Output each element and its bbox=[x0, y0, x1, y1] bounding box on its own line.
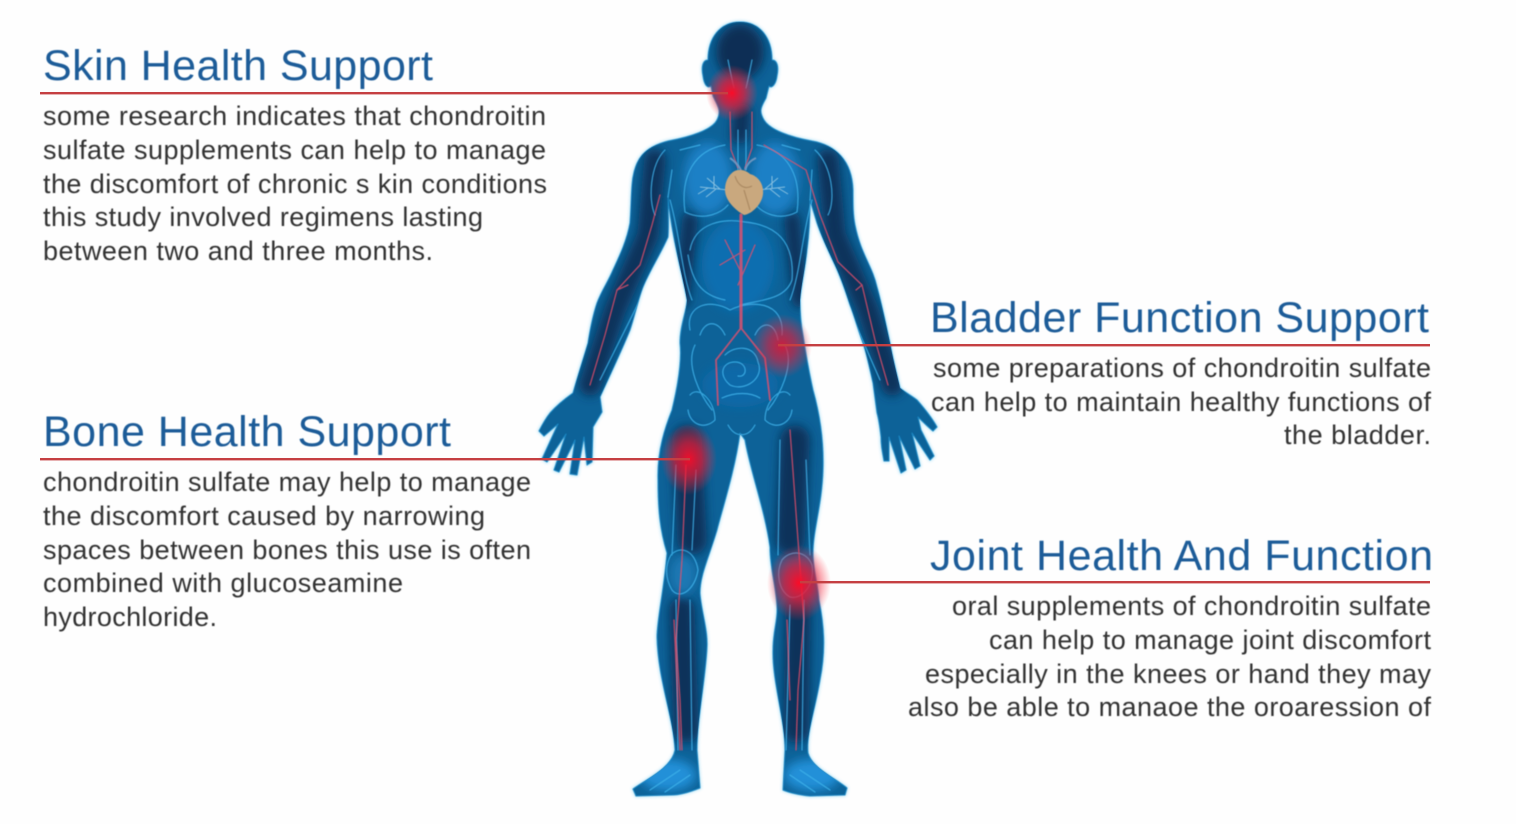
text: skin health body: some research indicates that chondroitin bbox=[43, 101, 546, 131]
text: bladder function body: the bladder. bbox=[1284, 420, 1431, 450]
veins and arteries bbox=[590, 112, 888, 750]
text: bone health body: combined with glucoseamine bbox=[43, 568, 403, 598]
text: bone health body bbox=[43, 467, 531, 632]
heading: joint health: Joint Health And Function bbox=[930, 532, 1433, 580]
text: bladder function body: can help to maintain healthy functions of bbox=[931, 387, 1431, 417]
panel: bone health bbox=[43, 408, 531, 632]
leader line: bladder bbox=[778, 344, 1430, 346]
text: skin health body: this study involved regimens lasting bbox=[43, 202, 483, 232]
human body anatomy figure bbox=[539, 22, 937, 796]
text: joint health body: especially in the knees or hand they may bbox=[925, 659, 1432, 689]
glow: bone on thigh bbox=[661, 423, 717, 495]
text: bone health body: the discomfort caused by narrowing bbox=[43, 501, 485, 531]
leader line: bone bbox=[40, 458, 690, 460]
text: joint health body: also be able to manaoe the oroaression of bbox=[908, 692, 1431, 722]
text: skin health body: sulfate supplements can help to manage bbox=[43, 135, 546, 165]
glow: skin on face bbox=[706, 65, 758, 121]
panel: bladder function bbox=[930, 294, 1431, 450]
body outer glow bbox=[539, 22, 937, 796]
text: bladder function body bbox=[931, 353, 1431, 450]
leader line: joint bbox=[800, 581, 1430, 583]
text: bone health body: hydrochloride. bbox=[43, 602, 217, 632]
heading: bone health: Bone Health Support bbox=[43, 408, 451, 456]
panel: skin health bbox=[43, 42, 547, 266]
text: bladder function body: some preparations of chondroitin sulfate bbox=[933, 353, 1431, 383]
body silhouette bbox=[539, 22, 937, 796]
text: bone health body: chondroitin sulfate may help to manage bbox=[43, 467, 531, 497]
text: bone health body: spaces between bones this use is often bbox=[43, 535, 531, 565]
glow: knee joint bbox=[767, 545, 831, 621]
inner shading and organs bbox=[590, 24, 892, 792]
text: skin health body: between two and three months. bbox=[43, 236, 433, 266]
text: skin health body: the discomfort of chronic s kin conditions bbox=[43, 169, 547, 199]
text: joint health body: can help to manage joint discomfort bbox=[989, 625, 1431, 655]
glow: bladder bbox=[752, 314, 812, 378]
lung bronchi bbox=[698, 176, 788, 197]
panel: joint health bbox=[908, 532, 1433, 722]
text: joint health body bbox=[908, 591, 1432, 722]
heading: skin health: Skin Health Support bbox=[43, 42, 433, 90]
organ outlines bbox=[600, 60, 880, 792]
heart bbox=[725, 158, 763, 215]
text: skin health body bbox=[43, 101, 547, 266]
leader line: skin bbox=[40, 92, 728, 94]
heading: bladder function: Bladder Function Support bbox=[930, 294, 1429, 342]
text: joint health body: oral supplements of chondroitin sulfate bbox=[952, 591, 1431, 621]
